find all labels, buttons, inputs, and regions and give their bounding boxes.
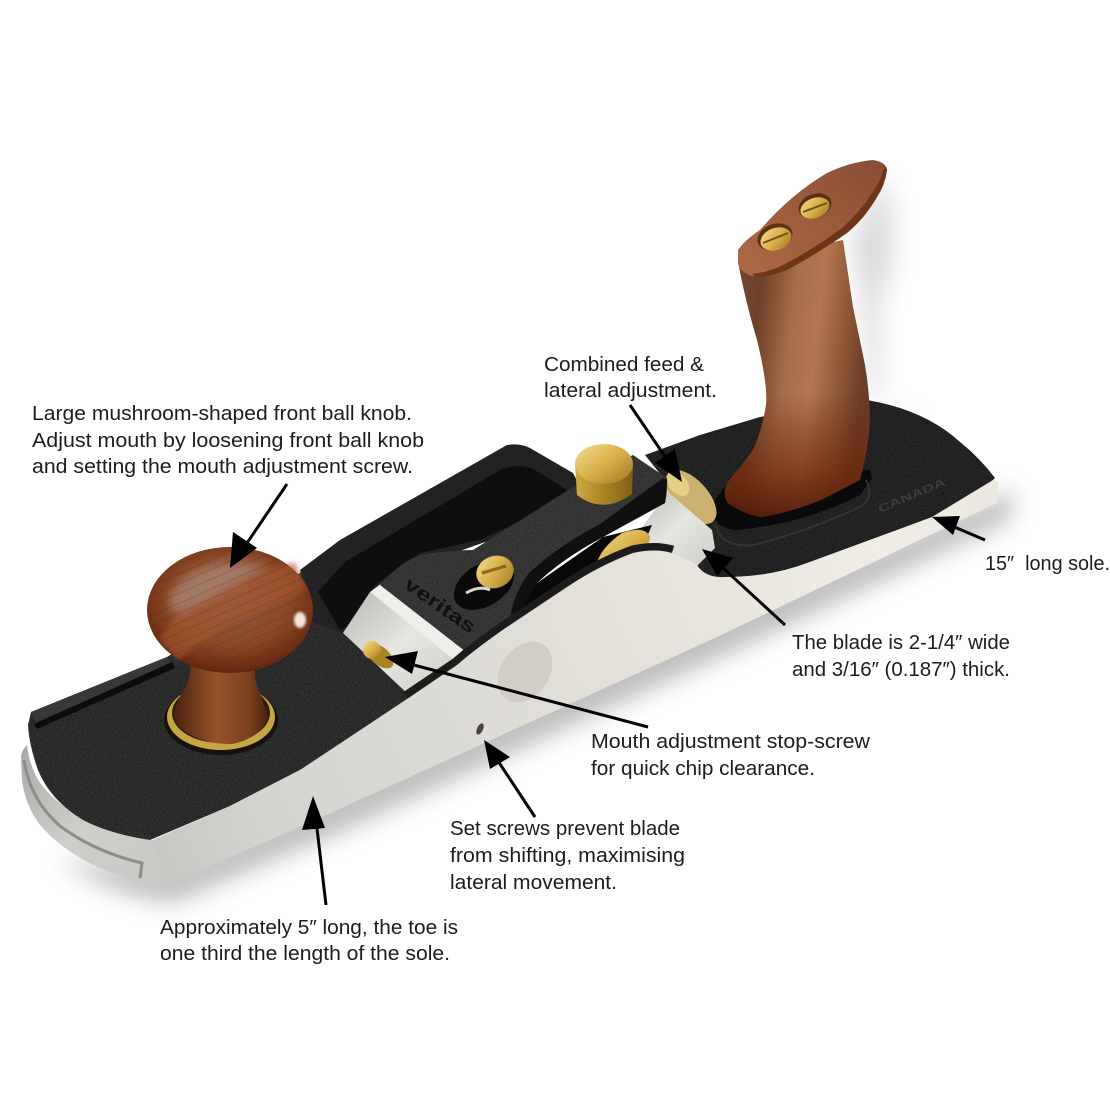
- text: blade note: The blade is 2-1/4″ wide: [792, 632, 1010, 654]
- knob grain lines: [147, 547, 313, 673]
- lever cap slot: [445, 550, 523, 620]
- lever cap texture: [380, 455, 667, 655]
- text: stop-screw note: [591, 731, 871, 780]
- arrow to stop-screw: [385, 651, 648, 727]
- arrow to sole: [932, 516, 985, 540]
- plane body: [21, 400, 998, 883]
- front ball knob: [147, 547, 313, 755]
- stamped CANADA mark: CANADA: [876, 477, 948, 516]
- arrow to knob: [230, 484, 287, 568]
- knob brass ring: [164, 683, 278, 755]
- toe plate texture: [28, 540, 430, 840]
- brass lever thumb knob: [575, 444, 633, 505]
- knurled feed adjustment wheel: [656, 461, 726, 533]
- tote top cap: [738, 160, 887, 277]
- text: stop-screw note: Mouth adjustment stop-screw: [591, 731, 871, 753]
- callout: sole length: [932, 516, 1110, 575]
- text: adjustment note: [544, 354, 717, 402]
- tote reddish base: [725, 240, 870, 517]
- blade bevel: [370, 583, 470, 662]
- tote lower brass screw: [754, 219, 796, 255]
- text: blade note: [792, 632, 1010, 681]
- knob head: [147, 547, 313, 673]
- brass nut below lever cap: [596, 530, 650, 570]
- text: set screw note: Set screws prevent blade: [450, 818, 680, 840]
- rear deck texture: [645, 400, 995, 600]
- text: toe note: Approximately 5″ long, the toe is: [160, 917, 458, 939]
- text: stop-screw note: for quick chip clearance.: [591, 758, 815, 780]
- text: set screw note: [450, 818, 685, 894]
- silver side of the body: [150, 480, 998, 883]
- arrow to toe: [302, 796, 326, 905]
- arrow to blade: [702, 549, 785, 625]
- text: knob note: Adjust mouth by loosening front ball knob: [32, 430, 424, 452]
- knob highlight: [294, 612, 306, 628]
- text: blade note: and 3/16″ (0.187″) thick.: [792, 659, 1010, 681]
- rear tote handle: [725, 160, 887, 517]
- knob pale sheen band: [168, 562, 270, 615]
- mouth stop screw: [362, 639, 398, 673]
- tote cap lower edge: [752, 166, 887, 277]
- toe end groove: [24, 760, 142, 878]
- text: knob note: and setting the mouth adjustment screw.: [32, 456, 413, 478]
- drop shadow of the plane: [60, 175, 1015, 902]
- text: toe note: [160, 917, 458, 965]
- black bed and walls: [300, 444, 590, 633]
- tote upper brass screw: [795, 189, 835, 223]
- black toe plate: [28, 540, 430, 840]
- gap below lever cap: [505, 525, 652, 630]
- text: set screw note: from shifting, maximising: [450, 845, 685, 867]
- arrow to adjuster: [630, 405, 682, 482]
- callout: set screws: [450, 740, 685, 894]
- knob wood band: [160, 562, 306, 660]
- blade at front: [343, 592, 457, 696]
- text: knob note: Large mushroom-shaped front ball knob.: [32, 403, 412, 425]
- text: adjustment note: lateral adjustment.: [544, 380, 717, 402]
- callout: feed and lateral adjustment: [544, 354, 717, 482]
- knob stem: [174, 660, 268, 744]
- text: sole note: 15″ long sole.: [985, 553, 1110, 575]
- lever cap dark front face: [510, 478, 667, 625]
- lever cap screw: [466, 550, 518, 594]
- round peen mark on the side: [486, 631, 564, 713]
- toe plate rail: [31, 657, 172, 722]
- lever cap: [380, 455, 667, 655]
- arrow to set screw: [484, 740, 535, 817]
- text: adjustment note: Combined feed &: [544, 354, 705, 376]
- stamped veritas logo: veritas: [400, 574, 479, 638]
- rear deck ridge: [716, 480, 869, 545]
- callout: mouth stop-screw: [385, 651, 871, 780]
- rear black deck: [645, 400, 995, 600]
- blade at rear: [633, 492, 715, 566]
- callout: blade size: [702, 549, 1010, 681]
- rear deck recess around tote: [712, 470, 872, 530]
- text: toe note: one third the length of the sole.: [160, 943, 450, 965]
- bed inner shadow: [318, 466, 575, 630]
- silver toe end: [21, 745, 172, 883]
- dark body lip along the side: [408, 550, 672, 698]
- text: knob note: [32, 403, 424, 478]
- tote body: [725, 240, 870, 517]
- text: set screw note: lateral movement.: [450, 872, 617, 894]
- callout: toe length: [160, 796, 458, 965]
- callout: front ball knob: [32, 403, 424, 568]
- set screw: [475, 722, 485, 736]
- toe plate rail groove: [34, 662, 175, 729]
